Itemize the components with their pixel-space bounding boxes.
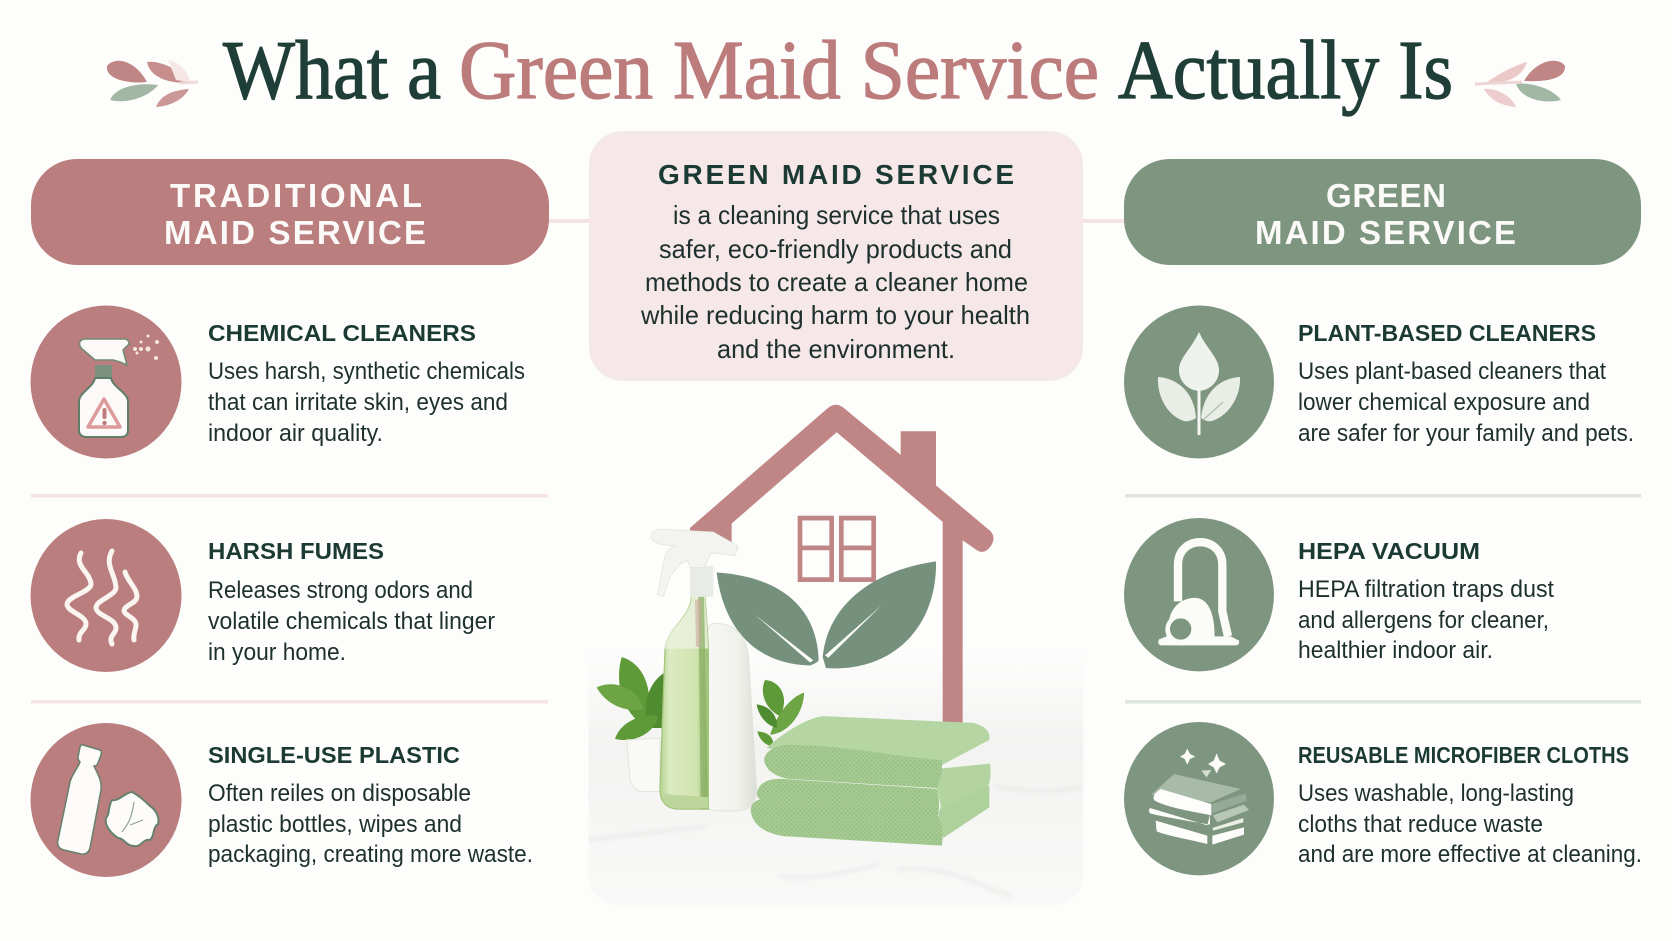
item heading: CHEMICAL CLEANERS xyxy=(208,320,476,346)
header pill: green xyxy=(1124,159,1641,265)
icon: plastic bottle and crumpled wipe xyxy=(30,723,182,877)
house outline xyxy=(690,405,994,723)
title: Green Maid Service xyxy=(459,24,1099,117)
pot plant left xyxy=(597,657,667,792)
icon: left title leaf sprig xyxy=(107,60,198,107)
item text xyxy=(208,780,533,868)
green spray bottle xyxy=(660,596,708,809)
icon: cloths and sparkles xyxy=(1124,722,1274,875)
icon: plant xyxy=(1124,306,1274,458)
panel: green item 3 microfiber cloths xyxy=(1124,722,1642,875)
pot plant right xyxy=(757,680,804,747)
item text: and allergens for cleaner, xyxy=(1298,607,1549,634)
item text: HEPA filtration traps dust xyxy=(1298,576,1554,603)
header pill: traditional: MAID SERVICE xyxy=(164,214,426,251)
towel bottom layer xyxy=(938,785,989,838)
item text: Releases strong odors and xyxy=(208,577,473,604)
item text: and are more effective at cleaning. xyxy=(1298,841,1642,868)
divider left 2 xyxy=(31,700,548,704)
item text: volatile chemicals that linger xyxy=(208,608,495,635)
header pill: traditional xyxy=(31,159,549,265)
panel: traditional item 1 chemical cleaners xyxy=(30,306,525,458)
item text xyxy=(1298,576,1554,664)
item text xyxy=(208,577,495,666)
leaf emblem xyxy=(717,561,936,668)
spray trigger xyxy=(652,529,738,597)
definition text: safer, eco-friendly products and xyxy=(659,234,1012,264)
connector: right xyxy=(1081,219,1125,223)
towel middle side xyxy=(937,763,991,809)
towel bottom front xyxy=(751,799,943,846)
item text xyxy=(1298,358,1634,447)
panel: definition xyxy=(589,131,1083,381)
towel middle front xyxy=(757,779,939,819)
header pill: green: MAID SERVICE xyxy=(1255,214,1516,251)
item text: Often reiles on disposable xyxy=(208,780,471,807)
definition text: while reducing harm to your health xyxy=(640,300,1030,330)
divider left 1 xyxy=(31,494,548,498)
panel: traditional item 3 single-use plastic xyxy=(30,723,533,877)
title: Actually Is xyxy=(1118,24,1453,117)
icon: fumes xyxy=(30,519,182,672)
item heading: HEPA VACUUM xyxy=(1298,538,1480,564)
header pill: traditional: TRADITIONAL xyxy=(170,177,422,214)
folded microfiber towels xyxy=(751,716,991,846)
definition text: is a cleaning service that uses xyxy=(673,200,1000,230)
panel: green item 1 plant-based cleaners xyxy=(1124,306,1634,458)
item text: healthier indoor air. xyxy=(1298,637,1493,664)
title: What a xyxy=(223,24,441,117)
header pill: green: GREEN xyxy=(1326,177,1446,214)
definition text: methods to create a cleaner home xyxy=(645,267,1028,297)
definition text: and the environment. xyxy=(717,334,955,364)
white bottle xyxy=(705,623,757,811)
divider right 1 xyxy=(1125,494,1641,498)
item text: indoor air quality. xyxy=(208,420,383,447)
item text: Uses harsh, synthetic chemicals xyxy=(208,358,525,385)
item heading: SINGLE-USE PLASTIC xyxy=(208,742,460,768)
item heading: REUSABLE MICROFIBER CLOTHS xyxy=(1298,742,1629,768)
item text: that can irritate skin, eyes and xyxy=(208,389,508,416)
definition heading: GREEN MAID SERVICE xyxy=(658,159,1014,190)
divider right 2 xyxy=(1125,700,1641,704)
item text xyxy=(208,358,525,447)
item text: Uses plant-based cleaners that xyxy=(1298,358,1606,385)
item heading: PLANT-BASED CLEANERS xyxy=(1298,320,1596,346)
icon: right title leaf sprig xyxy=(1475,61,1565,107)
item text: packaging, creating more waste. xyxy=(208,841,533,868)
panel: green item 2 hepa vacuum xyxy=(1124,518,1554,671)
item text: plastic bottles, wipes and xyxy=(208,811,462,838)
title xyxy=(223,24,1453,117)
item text: are safer for your family and pets. xyxy=(1298,420,1634,447)
icon: spray bottle with warning xyxy=(30,306,182,458)
item text: cloths that reduce waste xyxy=(1298,811,1543,838)
item heading: HARSH FUMES xyxy=(208,538,384,564)
item text: in your home. xyxy=(208,639,346,666)
icon: vacuum xyxy=(1124,518,1274,671)
definition text xyxy=(640,200,1030,364)
item text xyxy=(1298,780,1642,868)
towel top front xyxy=(764,745,942,788)
towel top surface xyxy=(767,716,990,788)
house window xyxy=(800,518,874,580)
item text: lower chemical exposure and xyxy=(1298,389,1590,416)
panel: traditional item 2 harsh fumes xyxy=(30,519,495,672)
panel: house illustration xyxy=(588,383,1083,910)
connector: left xyxy=(549,219,591,223)
item text: Uses washable, long-lasting xyxy=(1298,780,1574,807)
